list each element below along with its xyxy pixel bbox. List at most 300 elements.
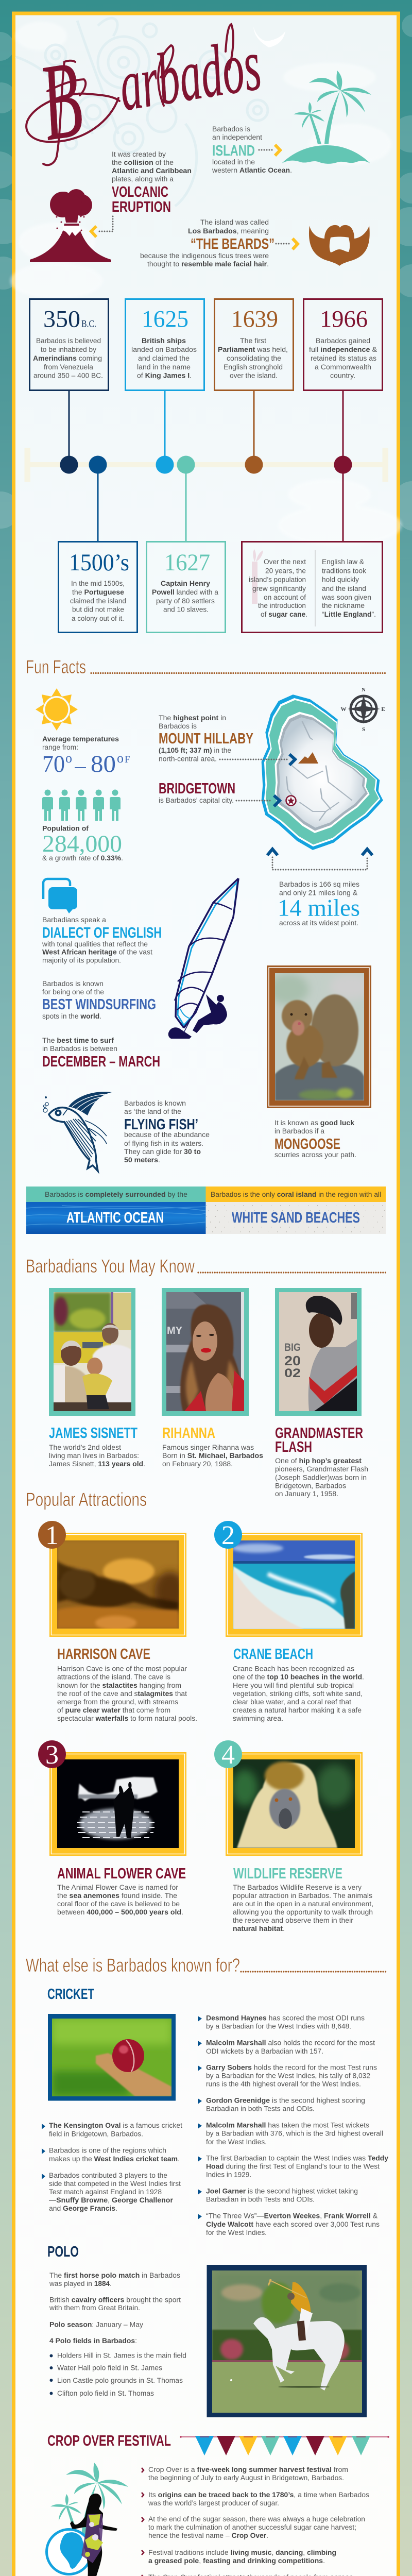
heading: Fun Facts: Fun Facts [26,656,86,677]
person: Grandmaster Flash text: FLASH [275,1439,312,1455]
cricket facts: right column: Garry Sobers holds the record for the most Test runs [206,2064,377,2071]
person: James Sisnett text: living man lives in Barbados: [49,1452,139,1460]
heading: Polo: POLO [47,2244,79,2260]
Animal Flower Cave text: ANIMAL FLOWER CAVE [57,1866,186,1882]
icon: compass: N [362,687,366,693]
dancer silhouette [70,2494,117,2576]
cricket facts: left column: Barbados contributed 3 players to the [49,2172,167,2179]
population text: 284,000 [42,831,122,857]
beards text: Los Barbados , meaning [188,227,269,235]
Crane Beach text: Here you will find plentiful sub-tropical [233,1682,354,1689]
population text: & a growth rate of 0.33%. [42,854,123,862]
panel: 1625: 1625 [142,306,188,333]
title: arbados [113,24,266,126]
polo facts: 4 Polo fields in Barbados : [49,2337,137,2345]
panel: next 20 years: grew significantly [252,585,306,592]
panel: next 20 years: island’s population [249,576,306,583]
polo facts: Clifton polo field in St. Thomas [57,2389,154,2397]
Harrison Cave text: spectacular waterfalls to form natural pools. [57,1715,197,1722]
attraction 3: Animal Flower Cave [38,1740,186,1856]
panel: 1625: and claimed the [138,354,190,362]
panel: 350 BC: Amerindians coming [33,354,102,362]
photo: Rihanna: MY [167,1325,183,1336]
beards text [140,218,274,268]
photo: Rihanna [162,1288,249,1416]
windsurfing text: Barbados is known [42,980,104,988]
banner: white sand: Barbados is the only coral island in the region with all [211,1191,381,1198]
size text: 14 miles [278,894,360,921]
dialect text: majority of its population. [42,956,121,964]
panel: 1625: landed on Barbados [131,346,197,353]
Animal Flower Cave text [57,1866,186,1916]
icon: flying fish [43,1092,112,1171]
cricket facts: left column [42,2122,182,2212]
heading: Popular Attractions: Popular Attractions [26,1489,147,1510]
icon: compass: W [341,706,346,713]
temperature text: 80 [91,751,116,777]
crop over facts [142,2466,369,2576]
cricket facts: right column: “The Three Ws”— Everton Weekes , Frank Worrell & [206,2212,377,2219]
attraction 2: Crane Beach [214,1521,363,1637]
Wildlife Reserve text: WILDLIFE RESERVE [233,1866,342,1882]
cricket facts: left column: Test match against England in 1928 [49,2188,162,2196]
panel: next 20 years [242,542,382,633]
icon: sugar cane [252,549,263,604]
photo: mongoose [267,965,371,1108]
Harrison Cave text: Harrison Cave is one of the most popular [57,1665,187,1672]
person: James Sisnett text: JAMES SISNETT [49,1425,138,1442]
panel: next 20 years: hold quickly [322,576,359,583]
dialect text: with tonal qualities that reflect the [42,940,148,948]
Wildlife Reserve text: are out in the open in a natural environment, [233,1900,373,1908]
panel: 1627: 1627 [164,549,210,576]
timeline dots [60,455,352,474]
timeline [25,391,388,541]
photo: Grandmaster Flash: 02 [284,1366,301,1380]
mongoose text [274,1119,356,1159]
badge 1: 1 [45,1521,59,1550]
person: Grandmaster Flash text: GRANDMASTER [275,1425,363,1442]
Wildlife Reserve text: popular attraction in Barbados. The animals [233,1892,372,1900]
panel: 350 BC: B.C. [81,318,96,330]
mongoose text: scurries across your path. [274,1151,356,1159]
polo facts: with them from Great Britain. [49,2304,140,2312]
crop over facts: hence the festival name – Crop Over. [148,2532,268,2539]
panel: next 20 years: “Little England”. [322,611,376,618]
person: Grandmaster Flash text: pioneers, Grandmaster Flash [275,1465,368,1473]
icon: windsurfer [168,878,238,1039]
panel: 1627: party of 80 settlers [156,597,215,605]
Harrison Cave text: HARRISON CAVE [57,1646,150,1663]
dialect text: West African heritage of the vast [42,948,152,956]
Crane Beach text: CRANE BEACH [233,1646,313,1663]
title: B [32,38,90,164]
mongoose text: It is known as good luck [274,1119,355,1127]
Animal Flower Cave text: the sea anemones found inside. The [57,1892,177,1900]
crop over facts: to mark the culmination of another successful sugar cane harvest; [148,2523,356,2531]
cricket facts: right column: Malcolm Marshall has taken the most Test wickets [206,2122,369,2129]
temperature text: o [117,751,124,766]
banner: Atlantic Ocean [26,1187,206,1234]
island text: Barbados is [212,125,250,133]
photo: cricket ball [48,2014,176,2101]
photo: James Sisnett [49,1288,135,1416]
photo: Grandmaster Flash: 20 [284,1353,301,1368]
panel: 350 BC: from Venezuela [44,363,93,371]
cricket facts: right column: Joel Garner is the second highest wicket taking [206,2188,358,2195]
Animal Flower Cave text: The Animal Flower Cave is named for [57,1884,179,1891]
beards text: thought to resemble male facial hair . [147,260,269,268]
Animal Flower Cave text: coral floor of the cave is believed to be [57,1900,180,1908]
Crane Beach text: Crane Beach has been recognized as [233,1665,354,1672]
panel: next 20 years: English law & [322,558,364,566]
beards text: because the indigenous ficus trees were [140,252,269,260]
person: Grandmaster Flash text: One of hip hop’s greatest [275,1457,362,1465]
heading: Crop Over Festival: CROP OVER FESTIVAL [47,2433,171,2449]
volcano text [112,150,192,215]
arrow to island [259,145,280,156]
banner: white sand: WHITE SAND BEACHES [232,1210,360,1226]
panel: 350 BC: 350 [43,306,80,333]
polo facts [49,2272,186,2397]
flying fish text: Barbados is known [124,1099,186,1107]
surf season text [42,1037,160,1070]
Crane Beach text: one of the top 10 beaches in the world . [233,1673,364,1681]
connector lines [69,391,343,541]
temperature text: o [65,751,72,766]
panel: 1500s: a colony out of it. [72,615,124,622]
panel: 1639: over the island. [230,372,278,379]
icon: dancer with palms and globe [46,2463,128,2576]
cricket facts: left column: field in Bridgetown, Barbados. [49,2130,143,2138]
panel: 1966: 1966 [320,306,368,333]
cricket facts: left column: and George Francis. [49,2205,117,2212]
panel: next 20 years: of sugar cane. [261,611,307,618]
panel: 1639: 1639 [231,306,278,333]
cricket facts: right column: by a Barbadian for the West Indies with 8,648. [206,2023,351,2030]
crop over facts: At the end of the sugar season, there was always a huge celebration [148,2515,365,2523]
cricket facts: right column: ODI wickets by a Barbadian with 157. [206,2047,323,2055]
polo facts: was played in 1884. [49,2280,112,2287]
population text: Population of [42,824,89,833]
panel: 350 BC: around 350 – 400 BC. [33,372,103,379]
island text: ISLAND [212,143,255,159]
crop over facts: the beginning of July to early August in Bridgetown, Barbados. [148,2474,344,2482]
polo facts: Holders Hill in St. James is the main field [57,2351,186,2360]
temperature text: range from: [42,743,78,751]
Mount Hillaby text [159,714,253,762]
photo: cave [57,1540,179,1629]
icon: people [42,789,121,821]
person: Grandmaster Flash text: on January 1, 1958. [275,1490,338,1498]
temperature text: 70 [42,751,65,777]
beards text: “THE BEARDS” [191,236,274,252]
polo facts: The first horse polo match in Barbados [49,2272,180,2279]
cricket facts: right column: Desmond Haynes has scored the most ODI runs [206,2014,365,2022]
polo facts: Polo season: January – May [49,2320,143,2329]
surf season text: in Barbados is between [42,1045,117,1053]
title [26,9,270,165]
Crane Beach text: vegetation, striking cliffs, soft white sand, [233,1690,363,1698]
dialect text [42,916,162,964]
Wildlife Reserve text: the reserve and observe them in their [233,1917,354,1924]
cricket facts: right column: for the West Indies. [206,2138,267,2146]
flying fish text: FLYING FISH’ [124,1116,198,1133]
panel: 1627: Powell landed with a [152,588,218,596]
panel: 1639: English stronghold [224,363,283,371]
panel: 1625 [126,299,204,391]
volcano text: the collision of the [112,159,174,166]
panel: 1625: of King James I. [137,372,192,379]
Bridgetown text: BRIDGETOWN [159,781,235,797]
photo: sea cave [57,1759,179,1848]
flying fish text: 50 meters. [124,1156,160,1164]
icon: capital star [286,795,296,806]
surf season text: DECEMBER – MARCH [42,1054,160,1070]
panel: 350 BC [30,299,108,391]
person: James Sisnett text: The world’s 2nd oldest [49,1444,121,1451]
panel: 1966: a Commonwealth [315,363,371,371]
panel: 350 BC: to be inhabited by [41,346,96,353]
arrow to beard [276,239,298,249]
icon: white bird [253,27,285,47]
panel: next 20 years: the nickname [322,602,365,609]
polo facts: Lion Castle polo grounds in St. Thomas [57,2377,183,2384]
panel: 1500s: the Portuguese [72,588,125,596]
Wildlife Reserve text: allowing you the opportunity to walk through [233,1908,373,1916]
volcano text: plates, along with a [112,175,174,183]
cricket facts: right column: Malcolm Marshall also holds the record for the most [206,2039,375,2046]
badge 3 [38,1740,66,1770]
Harrison Cave text: emerge from the ground, with streams [57,1698,178,1706]
person: James Sisnett text: James Sisnett, 113 years old. [49,1460,145,1468]
surf season text: The best time to surf [42,1037,114,1044]
panel: 1966: Barbados gained [316,337,370,345]
attraction 4: Wildlife Reserve [214,1740,363,1856]
Harrison Cave text [57,1646,197,1722]
polo facts: British cavalry officers brought the sport [49,2296,181,2304]
banner: Atlantic Ocean: ATLANTIC OCEAN [66,1210,164,1226]
size text [278,880,360,927]
person: Grandmaster Flash text: Bridgetown, Barbados [275,1482,346,1490]
panel: next 20 years: was soon given [321,594,371,601]
badge 3: 3 [45,1740,59,1770]
Harrison Cave text: attractions of the island. The cave is [57,1673,170,1681]
cricket facts: right column: for the West Indies. [206,2229,267,2236]
mongoose text: MONGOOSE [274,1136,340,1153]
cricket facts: right column: runs is the 4th highest overall for the West Indies. [206,2080,361,2088]
banner: white sand [206,1187,386,1234]
windsurfing text: spots in the world. [42,1012,101,1020]
Mount Hillaby text: Barbados is [159,722,197,730]
cricket facts: right column: The first Barbadian to captain the West Indies was Teddy [206,2155,388,2162]
heading: What else is Barbados known for?: What else is Barbados known for? [26,1955,240,1976]
polo facts: Water Hall polo field in St. James [57,2364,162,2372]
Harrison Cave text: the roof of the cave and s talagmites that [57,1690,187,1698]
cricket facts: right column: Barbadian in both Tests and ODIs. [206,2196,315,2203]
panel: 1500s: 1500’s [69,549,129,576]
icon: compass: E [381,706,385,713]
arrow to volcano [91,216,113,237]
photo: polo player [207,2265,367,2417]
panel: 1500s: but did not make [72,606,124,613]
mongoose text: in Barbados if a [274,1127,325,1135]
panel: 1500s: In the mid 1500s, [71,580,125,587]
flying fish text: because of the abundance [124,1131,210,1139]
panel: next 20 years: traditions took [322,567,366,575]
Crane Beach text: clear blue water, and a coral reef that [233,1698,351,1706]
panel: 1627: and 10 slaves. [163,606,209,613]
person: Rihanna text: RIHANNA [162,1425,215,1442]
island text: western Atlantic Ocean . [212,166,292,174]
bunting [180,2436,389,2455]
cricket facts: right column: by a Barbadian for the West Indies, his tally of 8,032 [206,2072,370,2079]
Crane Beach text [233,1646,364,1722]
icon: volcano [30,189,111,262]
icon: beard [309,225,370,266]
icon: compass [341,687,385,733]
cricket facts: right column: by a Barbadian with 376, which is the 3rd highest overall [206,2130,383,2137]
flying fish text [124,1099,210,1164]
person: Rihanna text: on February 20, 1988. [162,1460,233,1468]
Mount Hillaby text: north-central area. [159,755,217,762]
crop over facts: was the world’s largest producer of sugar. [148,2499,279,2507]
cricket facts: left column: —Snuffy Browne , George Challenor [49,2196,174,2204]
panel: next 20 years: on account of [264,594,306,601]
Harrison Cave text: known for the stalactites hanging from [57,1682,181,1689]
dialect text: Barbadians speak a [42,916,106,924]
Mount Hillaby text: MOUNT HILLABY [159,731,253,747]
dialect text: DIALECT OF ENGLISH [42,925,162,941]
panel: 1627: Captain Henry [161,580,211,587]
Harrison Cave text: of pure clear water that come from [57,1706,170,1714]
panel: 1500s [59,542,137,633]
volcano text: It was created by [112,150,166,158]
banner: Atlantic Ocean: Barbados is completely surrounded by the [45,1191,187,1198]
panel: 350 BC: Barbados is believed [36,337,101,345]
cricket facts: left column: Barbados is one of the regions which [49,2146,166,2155]
size text: across at its widest point. [279,919,358,927]
Bridgetown text [159,781,235,804]
cricket facts: right column: Indies in 1929. [206,2171,251,2178]
person: Rihanna text [162,1425,263,1468]
Wildlife Reserve text [233,1866,373,1933]
population text [42,824,123,862]
panel: 1627 [146,542,226,633]
panel: next 20 years: the introduction [258,602,306,609]
crop over facts: Festival traditions include living music, dancing, climbing [148,2549,336,2556]
crop over facts: a greased pole , feasting and drinking competitions . [148,2557,325,2565]
size text: and only 21 miles long & [279,889,357,896]
Bridgetown text: is Barbados’ capital city. [159,796,234,804]
island text: located in the [212,158,255,166]
Crane Beach text: creates a natural harbor making it a safe [233,1706,362,1714]
cricket facts: left column: makes up the West Indies cricket team . [49,2155,180,2163]
panel: 1639: Parliament was held, [218,346,288,353]
icon: compass: S [362,726,365,733]
volcano text: ERUPTION [112,199,171,215]
icon: sun [36,688,78,731]
panel: next 20 years: and the island [322,585,366,592]
temperature text [42,735,130,777]
badge 2: 2 [221,1521,235,1550]
panel: 1625: British ships [142,337,186,345]
panel: 1966: retained its status as [311,354,376,362]
volcano text: Atlantic and Caribbean [112,167,192,175]
icon: speech bubbles [43,879,77,913]
panel: 1966: country. [330,372,355,379]
decorative clouds and swirls [10,18,402,546]
panel: 1500s: claimed the island [70,597,126,605]
icon: palm island [282,71,371,164]
cricket facts: right column [198,2014,388,2236]
person: Rihanna text: Famous singer Rihanna was [162,1444,254,1451]
badge 4 [214,1740,242,1770]
island text: an independent [212,133,262,141]
heading: Cricket: CRICKET [47,1986,94,2003]
Crane Beach text: swimming area. [233,1715,283,1722]
temperature text: Average temperatures [42,735,119,743]
Mount Hillaby text: The highest point in [159,714,226,722]
windsurfing text: BEST WINDSURFING [42,996,156,1013]
Animal Flower Cave text: between 400,000 – 500,000 years old . [57,1908,183,1916]
arrows to map [220,754,295,806]
photo: beach [233,1540,355,1629]
panel: 1639 [214,299,294,391]
photo: Grandmaster Flash: BIG [284,1342,301,1353]
icon: mountain [298,752,318,764]
temperature text: F [125,754,130,765]
Wildlife Reserve text: The Barbados Wildlife Reserve is a very [233,1884,362,1891]
flying fish text: of flying fish in its waters. [124,1140,203,1147]
cricket facts: right column: Gordon Greenidge is the second highest scoring [206,2097,365,2104]
crop over facts: Crop Over is a five-week long summer harvest festival from [148,2466,348,2473]
photo: monkey [233,1759,355,1848]
person: James Sisnett text [49,1425,145,1468]
flying fish text: as ‘the land of the [124,1108,181,1115]
Wildlife Reserve text: natural habitat . [233,1925,285,1933]
width bracket [267,849,372,870]
cricket facts: left column: The Kensington Oval is a famous cricket [49,2122,182,2129]
panel: 1639: consolidating the [227,354,281,362]
cricket facts: right column: Hoad during the first Test of England’s tour to the West [206,2163,380,2170]
attraction 1: Harrison Cave [38,1521,186,1637]
panel: 1625: land in the name [137,363,191,371]
volcano text: VOLCANIC [112,184,168,200]
panel: 1966 [304,299,382,391]
badge 2 [214,1521,242,1550]
windsurfing text [42,980,156,1020]
windsurfing text: for being one of the [42,988,104,996]
panel: next 20 years: Over the next [264,558,306,566]
photo: Grandmaster Flash [275,1288,362,1416]
heading: Barbadians You May Know: Barbadians You May Know [26,1256,195,1277]
size text: Barbados is 166 sq miles [279,880,359,888]
crop over facts: Its origins can be traced back to the 1780’s , a time when Barbados [148,2491,369,2499]
badge 4: 4 [221,1740,235,1770]
cricket facts: right column: Clyde Walcott have each scored over 3,000 Test runs [206,2221,380,2228]
person: Grandmaster Flash text [275,1425,368,1498]
panel: 1639: The first [240,337,266,345]
flying fish text: They can glide for 30 to [124,1148,201,1156]
beards text: The island was called [200,218,269,226]
map of Barbados [262,694,383,850]
island text [212,125,292,174]
panel: 1966: full independence & [309,346,377,353]
Mount Hillaby text: (1,105 ft; 337 m) in the [159,747,231,754]
cricket facts: left column: side that competed in the West Indies first [49,2180,181,2188]
panel: next 20 years: 20 years, the [265,567,306,575]
